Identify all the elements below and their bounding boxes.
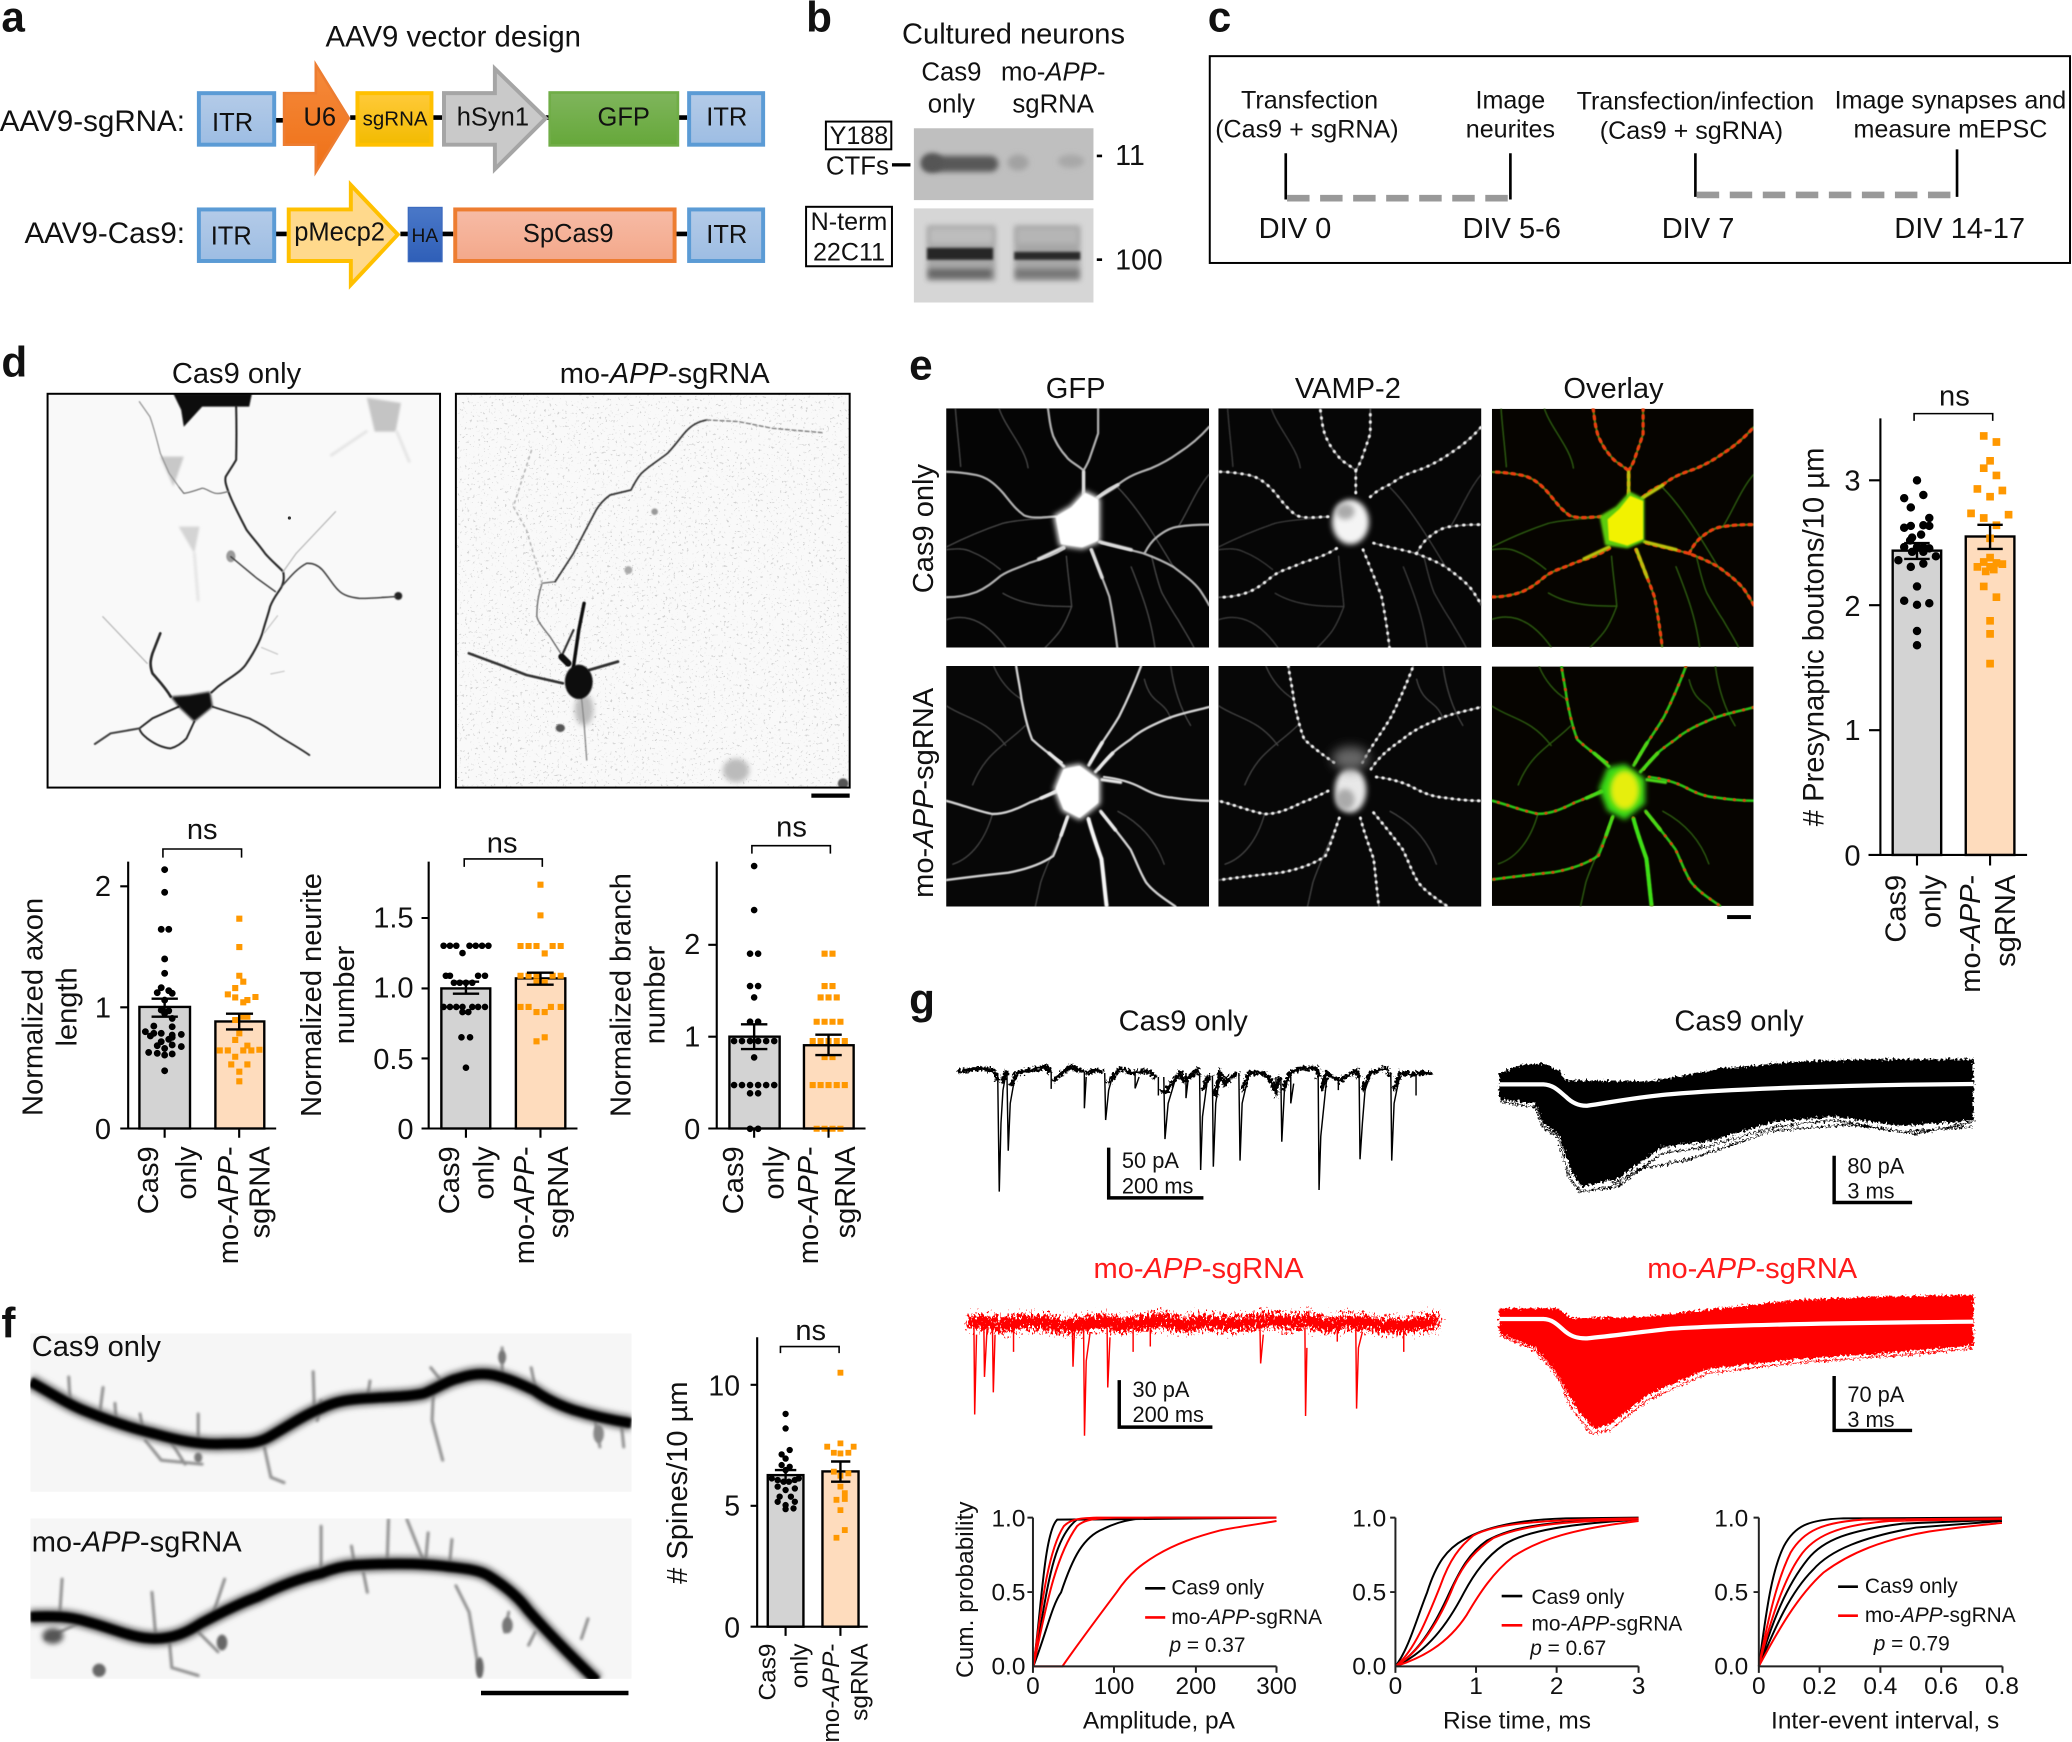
construct row: AAV9-sgRNA: ITR — [706, 104, 747, 132]
scale bar: 30 pA 200 ms — [1119, 1377, 1212, 1427]
chart: normalized axon length: Normalized axon — [17, 898, 49, 1116]
scale bar: 70 pA 3 ms — [1834, 1376, 1912, 1432]
chart: normalized branch number: sgRNA — [830, 1146, 862, 1238]
construct row: AAV9-sgRNA: U6 — [303, 104, 336, 132]
chart: normalized branch number: 1 — [684, 1022, 700, 1054]
heading: mo-APP-sgRNA: mo-APP-sgRNA — [560, 358, 770, 390]
chart: normalized axon length: Cas9 — [133, 1146, 165, 1214]
blot: CTFs — [914, 128, 1094, 200]
chart: presynaptic boutons: Cas9 — [1881, 875, 1913, 943]
timeline day labels — [1259, 213, 2025, 245]
connector lines — [275, 118, 687, 234]
chart: spines: 10 — [708, 1370, 740, 1402]
chart: normalized axon length: 1 — [95, 993, 111, 1025]
chart: amplitude cumulative probability: 100 — [1094, 1673, 1134, 1700]
chart: normalized neurite number: only — [469, 1146, 501, 1200]
timeline step labels: Transfection — [1241, 86, 1378, 114]
scale bar: 70 pA 3 ms: 3 ms — [1847, 1407, 1895, 1432]
construct row: AAV9-Cas9: ITR — [706, 221, 747, 249]
panel e: immunofluorescence — [908, 341, 2027, 993]
row labels: mo-APP-sgRNA — [908, 687, 940, 898]
chart: rise time cumulative probability: 1.0 — [1352, 1505, 1386, 1532]
chart: normalized neurite number: 1.0 — [373, 973, 414, 1005]
chart: spines: sgRNA — [847, 1643, 874, 1721]
chart: normalized branch number: 2 — [684, 929, 700, 961]
chart: spines: 5 — [724, 1491, 740, 1523]
chart: normalized axon length: 2 — [95, 871, 111, 903]
chart: normalized neurite number: 0.5 — [373, 1044, 414, 1076]
scale bar: 30 pA 200 ms: 200 ms — [1132, 1402, 1204, 1427]
chart: amplitude cumulative probability: Cum. probability — [952, 1501, 979, 1678]
row labels: Cas9 only — [908, 463, 940, 593]
chart: inter-event interval cumulative probability: Inter-event interval, s — [1771, 1707, 1999, 1734]
micrograph: mo-APP-sgRNA neuron — [456, 394, 849, 787]
chart: rise time cumulative probability: 0.0 — [1352, 1653, 1386, 1680]
antibody label Y188: Y188 — [830, 122, 888, 150]
chart: normalized branch number: mo-APP- — [793, 1146, 825, 1264]
chart: normalized neurite number: Cas9 — [434, 1146, 466, 1214]
molecular weight markers: 11 — [1115, 140, 1145, 172]
chart: rise time cumulative probability: 3 — [1632, 1673, 1645, 1700]
column headings: VAMP-2 — [1295, 373, 1401, 405]
chart: inter-event interval cumulative probability: 0.5 — [1714, 1579, 1748, 1606]
construct row: AAV9-sgRNA: sgRNA — [363, 108, 428, 131]
chart: presynaptic boutons: mo-APP- — [1955, 875, 1987, 993]
headings — [1094, 1006, 1858, 1285]
chart: spines: ns — [795, 1315, 826, 1347]
panel letter d: d — [1, 339, 27, 386]
scale bar: 30 pA 200 ms: 30 pA — [1132, 1377, 1190, 1402]
soma — [171, 692, 213, 722]
chart: normalized neurite number: Normalized neurite — [296, 873, 328, 1117]
chart: inter-event interval cumulative probability: p = 0.79 — [1873, 1632, 1950, 1655]
chart: normalized neurite number: number — [329, 945, 361, 1044]
timeline step labels: Transfection/infection — [1577, 88, 1814, 116]
scale bar: 80 pA 3 ms — [1834, 1153, 1912, 1204]
chart: normalized axon length: 0 — [95, 1114, 111, 1146]
chart: rise time cumulative probability: mo-APP-sgRNA — [1532, 1613, 1682, 1636]
timeline frame — [1210, 56, 2070, 263]
antibody label N-term 22C11 — [806, 207, 892, 266]
panel d: neuron morphology — [1, 339, 866, 1264]
chart: normalized neurite number: ns — [487, 827, 517, 859]
antibody label N-term 22C11: 22C11 — [813, 238, 885, 266]
label: Cas9 only: Cas9 only — [32, 1331, 161, 1363]
lane labels: mo-APP- — [1001, 59, 1105, 87]
trace: Cas9 only overlaid events — [1499, 1059, 1973, 1192]
micrograph: overlay mo-APP-sgRNA — [1492, 666, 1754, 906]
chart: normalized axon length: length — [52, 967, 84, 1047]
chart: rise time cumulative probability: p = 0.67 — [1529, 1637, 1606, 1660]
timeline day labels: DIV 0 — [1259, 213, 1331, 245]
chart: normalized branch number: number — [640, 945, 672, 1044]
chart: inter-event interval cumulative probability: Cas9 only — [1865, 1575, 1958, 1598]
micrograph: GFP mo-APP-sgRNA — [946, 666, 1210, 906]
chart: normalized axon length: sgRNA — [245, 1146, 277, 1238]
scale bar: 80 pA 3 ms: 80 pA — [1847, 1153, 1905, 1178]
chart: presynaptic boutons: 2 — [1844, 591, 1861, 623]
label CTFs: CTFs — [826, 152, 889, 180]
timeline step labels: measure mEPSC — [1854, 115, 2047, 143]
chart: normalized axon length: ns — [187, 814, 218, 846]
lane labels: sgRNA — [1012, 90, 1095, 118]
chart: rise time cumulative probability: 2 — [1550, 1673, 1563, 1700]
lane labels — [921, 59, 1105, 118]
CTF marker dash — [892, 163, 910, 167]
chart: normalized neurite number: 0 — [397, 1114, 414, 1146]
chart: amplitude cumulative probability: Cas9 only — [1171, 1576, 1265, 1599]
construct row: AAV9-Cas9 — [199, 185, 763, 285]
trace: mo-APP-sgRNA overlaid events — [1499, 1295, 1973, 1433]
chart: normalized branch number: Normalized branch — [605, 873, 637, 1117]
micrograph: VAMP-2 Cas9 only — [1218, 408, 1482, 648]
chart: amplitude cumulative probability: p = 0.37 — [1168, 1634, 1245, 1657]
chart: inter-event interval cumulative probability: mo-APP-sgRNA — [1865, 1604, 2016, 1627]
row labels — [908, 463, 940, 898]
headings: Cas9 only — [1119, 1006, 1248, 1038]
blot: N-term — [914, 208, 1094, 302]
row label AAV9-sgRNA: AAV9-sgRNA: — [0, 105, 185, 138]
chart: rise time cumulative probability: 0.5 — [1352, 1579, 1386, 1606]
chart: amplitude cumulative probability: 1.0 — [991, 1505, 1025, 1532]
chart: normalized branch number: 0 — [684, 1114, 700, 1146]
construct row: AAV9-Cas9: SpCas9 — [523, 220, 614, 248]
timeline day labels: DIV 5-6 — [1462, 213, 1561, 245]
antibody label N-term 22C11: N-term — [811, 208, 887, 236]
chart: presynaptic boutons: 0 — [1844, 841, 1861, 873]
construct row: AAV9-Cas9: pMecp2 — [294, 219, 385, 247]
molecular weight markers — [1097, 140, 1163, 277]
chart: presynaptic boutons — [1799, 381, 2027, 993]
lane labels: only — [928, 90, 975, 118]
scale bar: 50 pA 200 ms: 50 pA — [1122, 1148, 1179, 1173]
chart: rise time cumulative probability: 1 — [1469, 1673, 1483, 1700]
micrograph: VAMP-2 mo-APP-sgRNA — [1218, 666, 1482, 906]
timeline step labels — [1215, 86, 2066, 145]
scale bar: 70 pA 3 ms: 70 pA — [1847, 1382, 1905, 1407]
timeline step labels: neurites — [1466, 115, 1555, 143]
micrograph: overlay Cas9 only — [1492, 408, 1754, 648]
frame: Cas9 only neuron — [48, 394, 440, 788]
chart: spines — [662, 1315, 874, 1742]
panel f: dendritic spines — [1, 1299, 874, 1742]
chart: spines: only — [786, 1643, 813, 1688]
chart: rise time cumulative probability: Rise time, ms — [1443, 1707, 1591, 1734]
scale bar: 80 pA 3 ms: 3 ms — [1847, 1179, 1895, 1204]
chart: spines: Cas9 — [755, 1643, 782, 1701]
timeline step labels: Image synapses and — [1835, 86, 2066, 114]
chart: spines: # Spines/10 µm — [662, 1381, 694, 1584]
chart: presynaptic boutons: only — [1916, 874, 1948, 928]
chart: presynaptic boutons: 1 — [1844, 715, 1861, 747]
panel a: AAV9 vector design — [0, 0, 763, 285]
chart: amplitude cumulative probability: 200 — [1176, 1673, 1216, 1700]
chart: amplitude cumulative probability: 0.5 — [991, 1579, 1025, 1606]
panel letter f: f — [1, 1299, 16, 1346]
headings: mo-APP-sgRNA — [1094, 1253, 1304, 1285]
headings: Cas9 only — [1674, 1006, 1804, 1038]
chart: inter-event interval cumulative probability: 1.0 — [1714, 1505, 1748, 1532]
chart: amplitude cumulative probability: 300 — [1256, 1673, 1297, 1700]
heading: Cultured neurons: Cultured neurons — [902, 19, 1125, 51]
construct row: AAV9-sgRNA — [199, 65, 763, 172]
scale bar — [1727, 915, 1751, 919]
chart: normalized branch number — [605, 811, 866, 1264]
heading: AAV9 vector design: AAV9 vector design — [326, 20, 581, 53]
chart: normalized branch number: Cas9 — [718, 1146, 750, 1214]
chart: normalized branch number: only — [758, 1146, 790, 1200]
trace: mo-APP-sgRNA mEPSC recording — [969, 1320, 1439, 1436]
chart: normalized axon length: mo-APP- — [213, 1146, 245, 1264]
scale bar — [811, 794, 850, 798]
chart: presynaptic boutons: sgRNA — [1990, 874, 2022, 967]
micrograph: Cas9 only dendrite — [30, 1334, 632, 1492]
chart: spines: mo-APP- — [818, 1643, 845, 1742]
scale bar: 50 pA 200 ms: 200 ms — [1122, 1173, 1193, 1198]
timeline day labels: DIV 7 — [1662, 213, 1734, 245]
heading: Cas9 only: Cas9 only — [172, 358, 302, 390]
trace: Cas9 only mEPSC recording — [958, 1067, 1432, 1192]
timeline step labels: Image — [1476, 86, 1545, 114]
timeline markers and dashed intervals — [1286, 149, 1957, 200]
column headings — [1046, 373, 1664, 405]
molecular weight markers: 100 — [1115, 245, 1163, 277]
micrograph: GFP Cas9 only — [946, 408, 1210, 648]
chart: normalized neurite number: sgRNA — [543, 1146, 575, 1238]
construct row: AAV9-sgRNA: ITR — [212, 109, 253, 137]
panel letter g: g — [909, 976, 935, 1023]
chart: presynaptic boutons: # Presynaptic boutons/10 µm — [1799, 448, 1831, 826]
chart: presynaptic boutons: 3 — [1844, 465, 1861, 497]
chart: rise time cumulative probability: 0 — [1389, 1673, 1402, 1700]
lane labels: Cas9 — [921, 59, 981, 87]
construct row: AAV9-Cas9: HA — [412, 226, 438, 247]
micrograph: mo-APP-sgRNA dendrite — [30, 1518, 632, 1679]
chart: inter-event interval cumulative probability: 0.2 — [1803, 1673, 1837, 1700]
chart: inter-event interval cumulative probability: 0.4 — [1863, 1673, 1897, 1700]
panel g: electrophysiology — [909, 976, 2019, 1734]
scale bar — [481, 1691, 628, 1695]
construct row: AAV9-Cas9: ITR — [211, 222, 252, 250]
chart: inter-event interval cumulative probability: 0.8 — [1985, 1673, 2019, 1700]
construct row: AAV9-sgRNA: hSyn1 — [457, 104, 529, 132]
construct row: AAV9-sgRNA: GFP — [598, 104, 650, 132]
chart: normalized branch number: ns — [776, 811, 807, 843]
timeline step labels: (Cas9 + sgRNA) — [1215, 115, 1399, 143]
chart: inter-event interval cumulative probability: 0.6 — [1924, 1673, 1958, 1700]
chart: normalized neurite number: 1.5 — [373, 903, 414, 935]
chart: spines: 0 — [724, 1612, 740, 1644]
column headings: GFP — [1046, 373, 1106, 405]
chart: rise time cumulative probability: Cas9 only — [1532, 1586, 1625, 1609]
headings: mo-APP-sgRNA — [1647, 1253, 1858, 1285]
chart: amplitude cumulative probability: Amplitude, pA — [1083, 1707, 1236, 1734]
timeline step labels: (Cas9 + sgRNA) — [1600, 117, 1783, 145]
row label AAV9-Cas9: AAV9-Cas9: — [24, 217, 185, 250]
chart: amplitude cumulative probability: 0.0 — [991, 1653, 1025, 1680]
chart: rise time cumulative probability — [1352, 1505, 1682, 1734]
panel b: western blot — [806, 0, 1163, 303]
chart: amplitude cumulative probability: mo-APP-sgRNA — [1171, 1606, 1322, 1629]
chart: normalized neurite number — [296, 827, 577, 1264]
label: mo-APP-sgRNA: mo-APP-sgRNA — [32, 1526, 242, 1558]
chart: inter-event interval cumulative probability — [1714, 1505, 2019, 1734]
panel letter e: e — [909, 341, 933, 388]
timeline day labels: DIV 14-17 — [1894, 213, 2025, 245]
chart: normalized axon length — [17, 814, 277, 1264]
scale bar: 50 pA 200 ms — [1109, 1148, 1203, 1198]
frame: mo-APP-sgRNA neuron — [456, 394, 850, 788]
chart: inter-event interval cumulative probability: 0 — [1752, 1673, 1766, 1700]
chart: amplitude cumulative probability: 0 — [1026, 1673, 1040, 1700]
chart: inter-event interval cumulative probability: 0.0 — [1714, 1653, 1748, 1680]
chart: normalized neurite number: mo-APP- — [509, 1146, 541, 1264]
soma — [565, 665, 593, 699]
panel c: experimental timeline — [1208, 0, 2070, 263]
micrograph: Cas9 only neuron — [92, 394, 412, 757]
chart: presynaptic boutons: ns — [1939, 381, 1970, 413]
column headings: Overlay — [1563, 373, 1664, 405]
chart: amplitude cumulative probability — [952, 1501, 1322, 1734]
chart: normalized axon length: only — [171, 1146, 203, 1200]
